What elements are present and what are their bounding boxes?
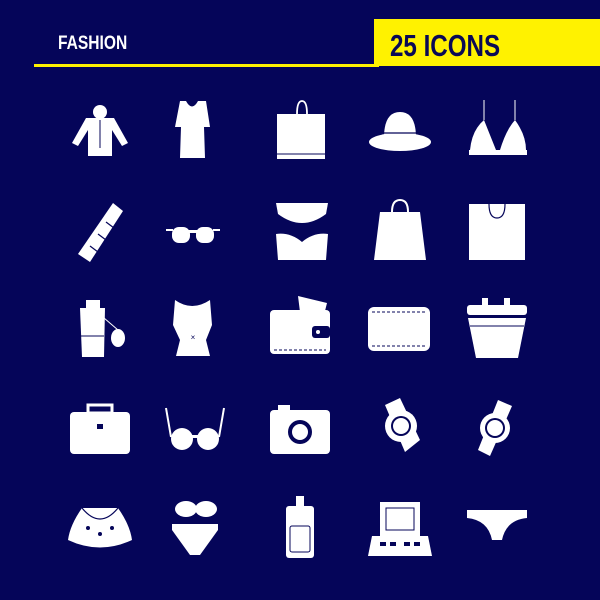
icon: swimsuit <box>276 203 328 260</box>
icon: bikini <box>172 501 218 555</box>
icon: round glasses <box>166 408 224 450</box>
icon: tie <box>78 203 123 262</box>
header line <box>34 64 379 67</box>
icon: perfume <box>80 300 125 357</box>
icon: bag 3 <box>469 204 525 260</box>
icon grid <box>68 100 527 558</box>
icon: sunglasses <box>166 227 220 243</box>
icon: corset: × <box>191 333 196 342</box>
icon: briefcase <box>70 405 130 454</box>
icon: watch <box>385 398 420 452</box>
icon: hoodie <box>72 105 128 156</box>
icon: hat <box>369 112 431 151</box>
icon: watch 2 <box>478 400 512 456</box>
icon: shopping bag 2 <box>374 200 426 260</box>
icon: corset <box>173 300 212 356</box>
icon: makeup kit <box>368 502 432 556</box>
title: FASHION <box>58 32 127 53</box>
icon: shopping bag <box>277 101 325 159</box>
icon: bottle <box>286 496 314 558</box>
icon: bra <box>469 100 527 155</box>
icon: basket <box>467 298 527 358</box>
icon: wallet <box>270 296 330 354</box>
badge: 25 icons <box>374 19 600 66</box>
icon: wallet 2 <box>368 307 430 351</box>
icon: dress <box>68 508 132 548</box>
icon: t-shirt <box>175 101 210 158</box>
icon: underwear <box>467 510 527 540</box>
badge: 25 icons: 25 ICONS <box>390 28 500 63</box>
icon: camera <box>270 405 330 454</box>
